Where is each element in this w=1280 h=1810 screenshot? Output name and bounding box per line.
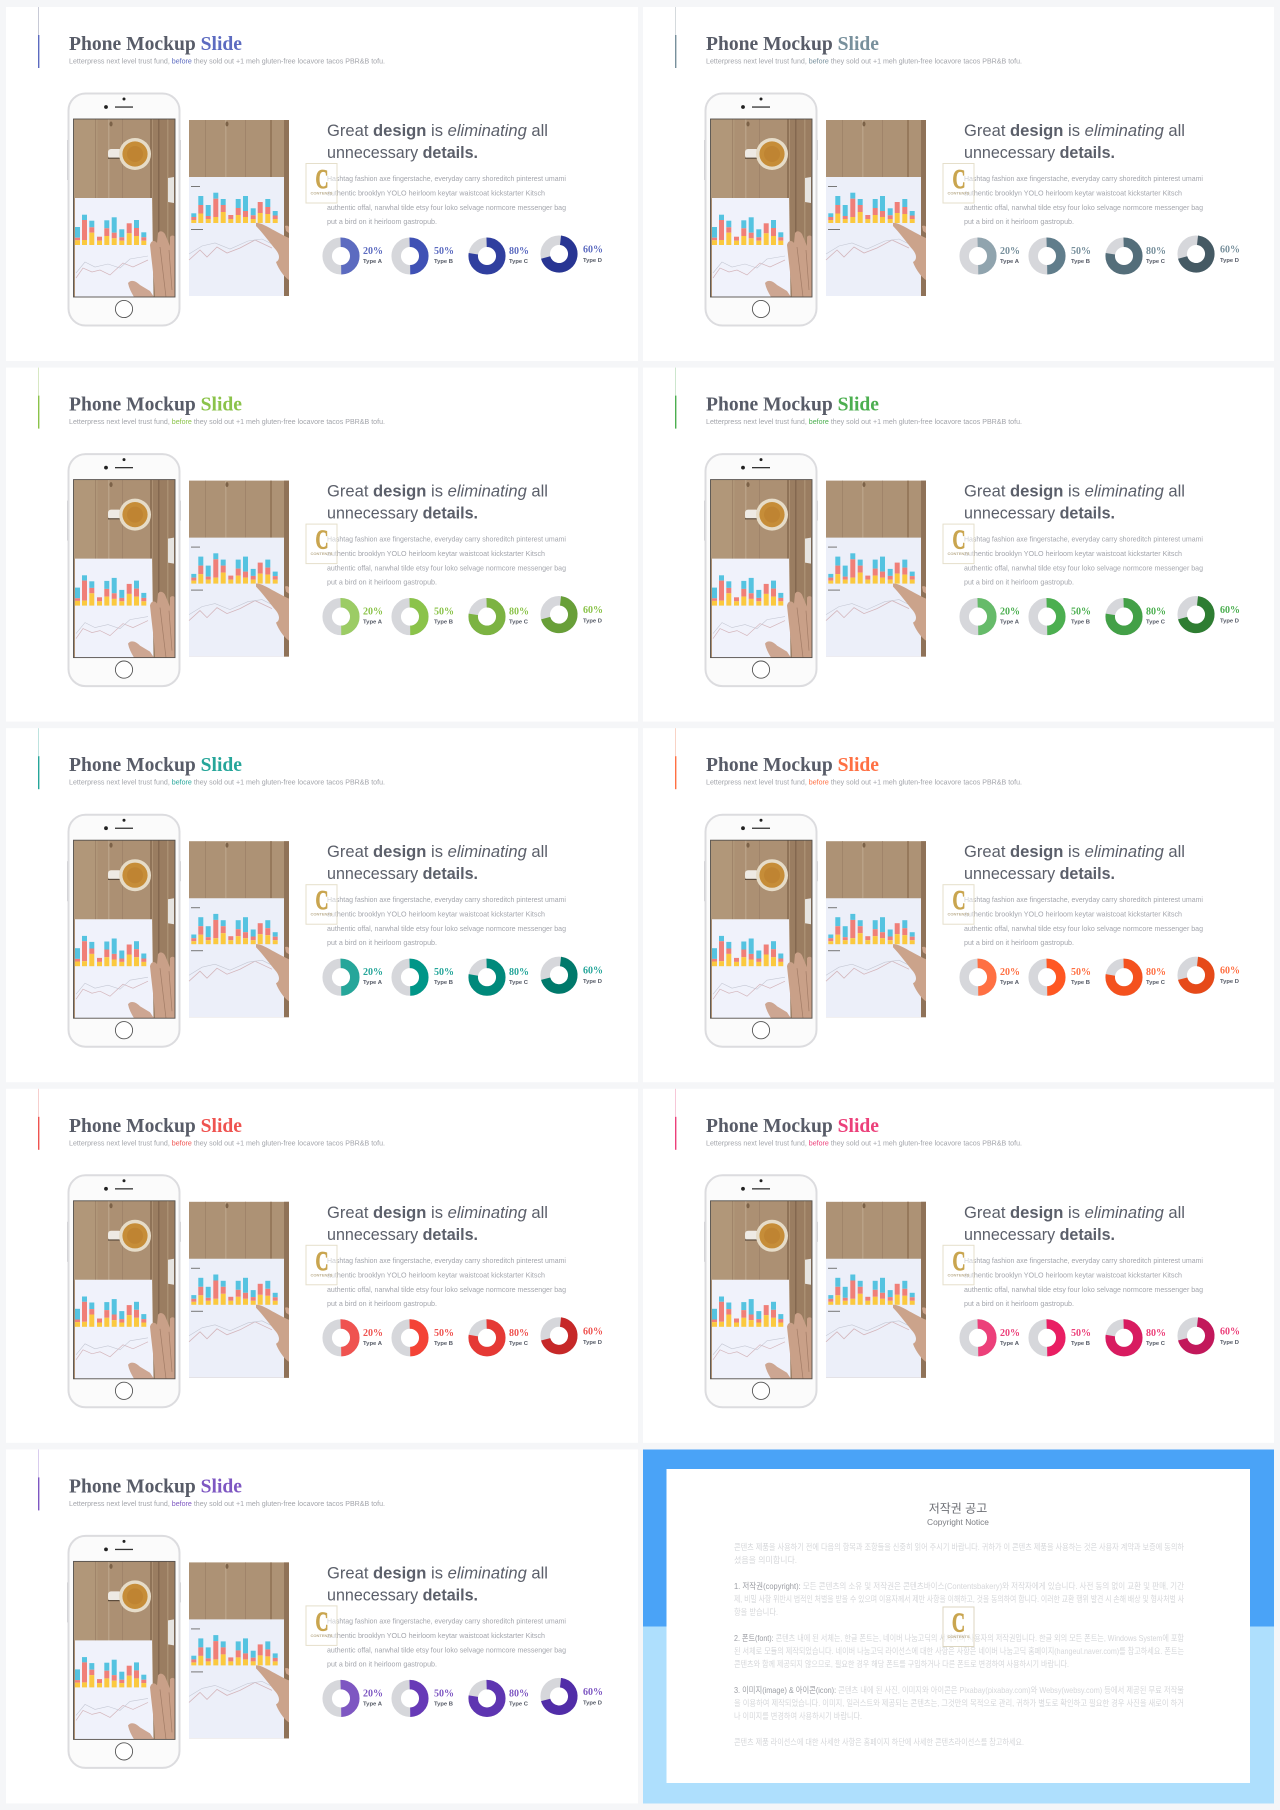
watermark	[943, 1607, 974, 1646]
donut A: Type A	[1000, 620, 1019, 626]
donut A: Type A	[363, 1341, 382, 1347]
donut A: 20%	[363, 606, 383, 618]
accent bar	[675, 1089, 676, 1150]
donut A: 20%	[1000, 606, 1020, 618]
donut B: 50%	[434, 1687, 454, 1699]
donut D: Type D	[583, 1340, 602, 1346]
donut D: Type D	[583, 258, 602, 264]
donut A: Type A	[1000, 259, 1019, 265]
notice subtitle: Copyright Notice	[927, 1517, 989, 1527]
donut C: Type C	[509, 259, 528, 265]
watermark: CONTENTS	[948, 551, 970, 556]
donut C	[1110, 242, 1166, 270]
notice body: 된 서체로 모듈의 제작되었습니다. 네이버 나눔고딕 라이선스에 대한 사항은 사항은 네이버 나눔고딕 홈페이지(hangeul.naver.com)를 참고하세요. 폰트는	[734, 1646, 1184, 1656]
white card	[666, 1469, 1250, 1783]
donut C	[473, 242, 529, 270]
body text: put a bird on it heirloom gastropub.	[327, 578, 437, 587]
body text	[964, 1256, 1203, 1308]
body text: put a bird on it heirloom gastropub.	[964, 578, 1074, 587]
panel: slide 1 indigo	[6, 7, 638, 361]
watermark	[943, 524, 974, 564]
heading: unnecessary details.	[327, 1226, 478, 1244]
watermark: CONTENTS	[310, 912, 333, 917]
panel: slide 6 orange	[643, 728, 1274, 1082]
donut A	[327, 963, 383, 991]
donut A: Type A	[1000, 980, 1019, 986]
notice body	[734, 1542, 1184, 1747]
watermark	[306, 164, 337, 203]
donut A: 20%	[1000, 1327, 1020, 1339]
notice body: 3. 이미지(image) & 아이콘(icon): 콘텐츠 내에 된 사진, 이미지와 아이콘은 Pixabay(pixabay.com)와 Websy(websy.com) 등에서 제공된 무료 저작물	[734, 1685, 1184, 1695]
donut C: 80%	[509, 606, 529, 618]
body text: put a bird on it heirloom gastropub.	[964, 217, 1074, 226]
donut C	[473, 603, 529, 630]
donut B: Type B	[434, 259, 453, 265]
title: Phone Mockup Slide	[69, 1475, 242, 1497]
body text: authentic brooklyn YOLO heirloom keytar waistcoat kickstarter Kitsch	[964, 188, 1182, 198]
donut B	[396, 1324, 454, 1352]
donut C: 80%	[1146, 966, 1166, 978]
donut B: 50%	[1071, 606, 1091, 618]
donut A	[327, 242, 383, 270]
donut B: Type B	[1071, 620, 1090, 626]
panel: slide 5 teal	[6, 728, 638, 1082]
donut D: 60%	[583, 244, 603, 256]
body text: authentic offal, narwhal tilde etsy four loko selvage normcore messenger bag	[964, 564, 1203, 573]
accent bar	[38, 1089, 39, 1150]
donut C: Type C	[1146, 259, 1165, 265]
donut A	[327, 1324, 383, 1352]
body text: Hashtag fashion axe fingerstache, everyday carry shoreditch pinterest umami	[327, 1616, 566, 1625]
donut B: Type B	[1071, 1341, 1090, 1347]
donut D: Type D	[1220, 1340, 1239, 1346]
heading: unnecessary details.	[327, 144, 478, 162]
phone and photo mockup	[704, 454, 926, 686]
heading: unnecessary details.	[964, 505, 1115, 523]
heading: Great design is eliminating all	[964, 843, 1185, 861]
notice body: 콘텐츠 제품 라이선스에 대한 사세한 사항은 홈페이지 하단에 사세한 콘텐츠라이선스를 참고하세요.	[734, 1737, 1024, 1747]
donut D	[543, 1320, 603, 1351]
donut A	[964, 963, 1020, 991]
heading: Great design is eliminating all	[327, 122, 548, 140]
donut D: 60%	[583, 604, 603, 616]
title: Phone Mockup Slide	[706, 754, 879, 776]
donut B	[396, 963, 454, 991]
donut B: Type B	[1071, 980, 1090, 986]
title: Phone Mockup Slide	[69, 394, 242, 416]
body text: authentic brooklyn YOLO heirloom keytar waistcoat kickstarter Kitsch	[964, 1270, 1182, 1279]
heading	[327, 843, 548, 883]
donut D: Type D	[1220, 619, 1239, 625]
body text	[327, 1616, 566, 1668]
donut C	[473, 1324, 529, 1352]
watermark: C	[952, 1246, 966, 1276]
phone and photo mockup	[704, 1175, 926, 1407]
heading: unnecessary details.	[327, 865, 478, 883]
watermark: C	[952, 885, 966, 915]
body text: put a bird on it heirloom gastropub.	[964, 938, 1074, 947]
donut D: Type D	[583, 979, 602, 985]
watermark: C	[316, 1246, 328, 1276]
body text	[327, 895, 566, 947]
body text	[964, 535, 1203, 587]
phone and photo mockup	[67, 1175, 289, 1407]
title: Phone Mockup Slide	[706, 33, 879, 55]
donut D	[543, 1681, 603, 1712]
heading	[964, 843, 1185, 883]
panel: slide 3 light green	[6, 368, 638, 722]
donut A: 20%	[1000, 966, 1020, 978]
donut D: 60%	[1220, 1325, 1240, 1337]
title: Phone Mockup Slide	[69, 33, 242, 55]
heading: Great design is eliminating all	[964, 483, 1185, 501]
donut B: 50%	[1071, 966, 1091, 978]
donut B	[1033, 1324, 1091, 1352]
donut C: 80%	[509, 1687, 529, 1699]
accent bar	[38, 1449, 39, 1510]
subtitle: Letterpress next level trust fund, before they sold out +1 meh gluten-free locavore tacos PBR&B tofu.	[69, 58, 385, 66]
body text: Hashtag fashion axe fingerstache, everyday carry shoreditch pinterest umami	[964, 174, 1203, 183]
body text: authentic offal, narwhal tilde etsy four loko selvage normcore messenger bag	[327, 924, 566, 933]
donut A	[327, 603, 383, 630]
donut D: 60%	[1220, 244, 1240, 256]
donut A	[327, 1685, 383, 1712]
body text: Hashtag fashion axe fingerstache, everyday carry shoreditch pinterest umami	[964, 535, 1203, 544]
phone and photo mockup	[704, 94, 926, 326]
donut C: Type C	[509, 1701, 528, 1707]
body text	[327, 1256, 566, 1308]
phone and photo mockup	[67, 1536, 289, 1768]
donut C	[1110, 603, 1166, 630]
title: Phone Mockup Slide	[69, 1115, 242, 1137]
heading: Great design is eliminating all	[327, 1204, 548, 1222]
heading	[964, 483, 1185, 523]
heading	[327, 1564, 548, 1604]
accent bar	[38, 368, 39, 429]
donut C: Type C	[1146, 620, 1165, 626]
watermark: CONTENTS	[948, 912, 970, 917]
watermark: CONTENTS	[310, 1272, 333, 1277]
donut B	[1033, 603, 1091, 630]
watermark: C	[316, 885, 328, 915]
heading: unnecessary details.	[327, 505, 478, 523]
donut B: 50%	[1071, 245, 1091, 257]
watermark: C	[316, 1606, 328, 1636]
body text: Hashtag fashion axe fingerstache, everyday carry shoreditch pinterest umami	[327, 1256, 566, 1265]
notice body: 2. 폰트(font): 콘텐츠 내에 된 서체는, 한글 폰트는, 네이버 나눔고딕의 서체이며 사용자의 저작권입니다. 한글 외의 모든 폰트는, Windows System에 포함	[734, 1633, 1184, 1643]
accent bar	[675, 7, 676, 68]
heading	[964, 1204, 1185, 1244]
body text: authentic offal, narwhal tilde etsy four loko selvage normcore messenger bag	[327, 1645, 566, 1654]
heading	[327, 122, 548, 162]
donut D: Type D	[1220, 979, 1239, 985]
title: Phone Mockup Slide	[706, 394, 879, 416]
blue frame lower	[643, 1626, 1274, 1804]
watermark	[943, 885, 974, 924]
donut C: 80%	[1146, 245, 1166, 257]
body text: put a bird on it heirloom gastropub.	[964, 1299, 1074, 1308]
donut A: 20%	[1000, 245, 1020, 257]
donut C: 80%	[509, 1327, 529, 1339]
donut D: 60%	[583, 1686, 603, 1698]
phone and photo mockup	[704, 815, 926, 1047]
donut A: 20%	[363, 1687, 383, 1699]
body text: Hashtag fashion axe fingerstache, everyday carry shoreditch pinterest umami	[964, 895, 1203, 904]
donut D: 60%	[1220, 604, 1240, 616]
body text: authentic brooklyn YOLO heirloom keytar waistcoat kickstarter Kitsch	[327, 1270, 545, 1279]
notice body: 을 이용하여 제작되었습니다. 이미지, 일러스트와 제공되는 콘텐츠는, 그것만의 목적으로 관리, 귀하가 별도로 확인하고 필요한 경우 사진을 새로이 하거	[734, 1698, 1184, 1708]
phone and photo mockup	[67, 454, 289, 686]
body text: Hashtag fashion axe fingerstache, everyday carry shoreditch pinterest umami	[327, 535, 566, 544]
donut D	[1180, 960, 1240, 991]
donut C	[473, 963, 529, 991]
subtitle: Letterpress next level trust fund, before they sold out +1 meh gluten-free locavore tacos PBR&B tofu.	[69, 1501, 385, 1508]
body text	[327, 535, 566, 587]
donut D	[1180, 238, 1240, 270]
watermark: CONTENTS	[948, 190, 970, 196]
heading: Great design is eliminating all	[327, 483, 548, 501]
body text: authentic offal, narwhal tilde etsy four loko selvage normcore messenger bag	[327, 564, 566, 573]
accent bar	[38, 7, 39, 68]
subtitle: Letterpress next level trust fund, before they sold out +1 meh gluten-free locavore tacos PBR&B tofu.	[706, 58, 1022, 66]
title: Phone Mockup Slide	[69, 754, 242, 776]
donut C: Type C	[1146, 980, 1165, 986]
body text: Hashtag fashion axe fingerstache, everyday carry shoreditch pinterest umami	[327, 174, 566, 183]
subtitle: Letterpress next level trust fund, before they sold out +1 meh gluten-free locavore tacos PBR&B tofu.	[706, 1140, 1022, 1147]
panel: slide 4 green	[643, 368, 1274, 722]
donut D: 60%	[583, 965, 603, 977]
heading	[327, 483, 548, 523]
heading: unnecessary details.	[964, 1226, 1115, 1244]
notice body: 셨음을 의미합니다.	[734, 1555, 797, 1565]
donut A	[964, 1324, 1020, 1352]
donut C: Type C	[509, 1341, 528, 1347]
donut A	[964, 242, 1020, 270]
body text: authentic offal, narwhal tilde etsy four loko selvage normcore messenger bag	[327, 203, 566, 212]
donut D: Type D	[1220, 258, 1239, 264]
heading: unnecessary details.	[964, 865, 1115, 883]
donut A: Type A	[363, 259, 382, 265]
heading: Great design is eliminating all	[327, 843, 548, 861]
accent bar	[38, 728, 39, 789]
subtitle: Letterpress next level trust fund, before they sold out +1 meh gluten-free locavore tacos PBR&B tofu.	[69, 419, 385, 426]
donut B	[1033, 242, 1091, 270]
watermark	[306, 1245, 337, 1285]
phone and photo mockup	[67, 815, 289, 1047]
donut B	[396, 1685, 454, 1712]
donut B: Type B	[434, 980, 453, 986]
body text: put a bird on it heirloom gastropub.	[327, 1659, 437, 1668]
heading: Great design is eliminating all	[964, 122, 1185, 140]
donut C	[1110, 963, 1166, 991]
donut C: Type C	[509, 620, 528, 626]
donut D	[543, 960, 603, 991]
donut A: 20%	[363, 966, 383, 978]
donut C: Type C	[509, 980, 528, 986]
watermark	[943, 164, 974, 203]
watermark: CONTENTS	[948, 1272, 970, 1277]
body text: authentic offal, narwhal tilde etsy four loko selvage normcore messenger bag	[964, 1285, 1203, 1294]
donut C: 80%	[1146, 1327, 1166, 1339]
notice body: 콘텐츠 제품을 사용하기 전에 다음의 항목과 조항들을 신중히 읽어 주시기 바랍니다. 귀하가 이 콘텐츠 제품을 사용하는 것은 사용자 계약과 보증에 동의하	[734, 1542, 1184, 1552]
panel: slide 8 pink	[643, 1089, 1274, 1443]
watermark: C	[952, 525, 966, 555]
body text: authentic brooklyn YOLO heirloom keytar waistcoat kickstarter Kitsch	[327, 549, 545, 558]
donut A: Type A	[363, 620, 382, 626]
donut D: 60%	[583, 1325, 603, 1337]
panel: slide 2 blue grey	[643, 7, 1274, 361]
donut A	[964, 603, 1020, 630]
body text	[964, 895, 1203, 947]
donut B: 50%	[434, 606, 454, 618]
donut B	[1033, 963, 1091, 991]
watermark: CONTENTS	[310, 190, 333, 196]
watermark: C	[316, 164, 328, 194]
body text: authentic brooklyn YOLO heirloom keytar waistcoat kickstarter Kitsch	[964, 910, 1182, 919]
body text: authentic brooklyn YOLO heirloom keytar waistcoat kickstarter Kitsch	[327, 188, 545, 198]
donut B	[396, 603, 454, 630]
donut C: 80%	[509, 966, 529, 978]
heading: unnecessary details.	[327, 1586, 478, 1604]
donut C	[473, 1685, 529, 1712]
donut C	[1110, 1324, 1166, 1352]
subtitle: Letterpress next level trust fund, before they sold out +1 meh gluten-free locavore tacos PBR&B tofu.	[706, 419, 1022, 426]
title: Phone Mockup Slide	[706, 1115, 879, 1137]
phone and photo mockup	[67, 94, 289, 326]
donut D: Type D	[583, 1700, 602, 1706]
watermark	[306, 885, 337, 924]
panel: slide 9 purple	[6, 1449, 638, 1803]
donut A: 20%	[363, 245, 383, 257]
notice body: 제, 비밀 사항 위반시 법적인 처벌을 받을 수 있으며 이용자께서 제반 사항을 이해하고, 것을 동의하여 합니다. 이러한 교환 행위 발견 시 손해 배상 및 형사처벌 사	[734, 1594, 1184, 1604]
subtitle: Letterpress next level trust fund, before they sold out +1 meh gluten-free locavore tacos PBR&B tofu.	[69, 780, 385, 787]
donut B	[396, 242, 454, 270]
donut C: 80%	[1146, 606, 1166, 618]
subtitle: Letterpress next level trust fund, before they sold out +1 meh gluten-free locavore tacos PBR&B tofu.	[69, 1140, 385, 1147]
watermark	[306, 524, 337, 564]
watermark	[306, 1606, 337, 1645]
body text: put a bird on it heirloom gastropub.	[327, 938, 437, 947]
panel: slide 7 red	[6, 1089, 638, 1443]
body text: authentic brooklyn YOLO heirloom keytar waistcoat kickstarter Kitsch	[964, 549, 1182, 558]
accent bar	[675, 368, 676, 429]
donut D: 60%	[1220, 965, 1240, 977]
body text: authentic brooklyn YOLO heirloom keytar waistcoat kickstarter Kitsch	[327, 910, 545, 919]
notice body: 1. 저작권(copyright): 모든 콘텐츠의 소유 및 저작권은 콘텐츠바이스(Contentsbakery)와 저작자에게 있습니다. 사전 동의 없이 교환 및 판매, 기간	[734, 1581, 1184, 1591]
body text: Hashtag fashion axe fingerstache, everyday carry shoreditch pinterest umami	[327, 895, 566, 904]
donut C: Type C	[1146, 1341, 1165, 1347]
watermark: CONTENTS	[310, 551, 333, 556]
subtitle: Letterpress next level trust fund, before they sold out +1 meh gluten-free locavore tacos PBR&B tofu.	[706, 780, 1022, 787]
body text: Hashtag fashion axe fingerstache, everyday carry shoreditch pinterest umami	[964, 1256, 1203, 1265]
heading	[964, 122, 1185, 162]
body text: authentic offal, narwhal tilde etsy four loko selvage normcore messenger bag	[327, 1285, 566, 1294]
donut A: Type A	[363, 980, 382, 986]
body text: authentic offal, narwhal tilde etsy four loko selvage normcore messenger bag	[964, 203, 1203, 212]
accent bar	[675, 728, 676, 789]
watermark: CONTENTS	[948, 1634, 970, 1639]
body text: authentic offal, narwhal tilde etsy four loko selvage normcore messenger bag	[964, 924, 1203, 933]
donut A: Type A	[363, 1701, 382, 1707]
heading	[327, 1204, 548, 1244]
notice body: 항을 받습니다.	[734, 1607, 778, 1617]
donut C: 80%	[509, 245, 529, 257]
donut D: Type D	[583, 619, 602, 625]
donut B: Type B	[434, 1341, 453, 1347]
donut D	[1180, 599, 1240, 630]
donut D	[543, 238, 603, 270]
body text	[964, 174, 1203, 226]
donut B: Type B	[434, 1701, 453, 1707]
heading: Great design is eliminating all	[964, 1204, 1185, 1222]
heading: unnecessary details.	[964, 144, 1115, 162]
watermark: C	[316, 525, 328, 555]
donut A: 20%	[363, 1327, 383, 1339]
watermark	[943, 1245, 974, 1285]
watermark: C	[952, 164, 966, 194]
donut A: Type A	[1000, 1341, 1019, 1347]
donut B: Type B	[434, 620, 453, 626]
heading: Great design is eliminating all	[327, 1564, 548, 1582]
donut D	[543, 599, 603, 630]
donut B: 50%	[1071, 1327, 1091, 1339]
notice body: 콘텐츠와 함께 제공되지 않으므로, 필요한 경우 해당 폰트를 구입하거나 다른 폰트로 변경하여 사용하시기 바랍니다.	[734, 1659, 1069, 1669]
donut B: Type B	[1071, 259, 1090, 265]
donut B: 50%	[434, 1327, 454, 1339]
body text	[327, 174, 566, 226]
panel: copyright notice	[643, 1450, 1274, 1804]
notice body: 나 이미지를 변경하여 사용하시기 바랍니다.	[734, 1711, 862, 1721]
notice title: 저작권 공고	[929, 1502, 987, 1516]
body text: authentic brooklyn YOLO heirloom keytar waistcoat kickstarter Kitsch	[327, 1631, 545, 1640]
donut D	[1180, 1320, 1240, 1351]
blue frame upper	[643, 1450, 1274, 1626]
watermark: CONTENTS	[310, 1633, 333, 1638]
watermark: C	[952, 1608, 965, 1638]
donut B: 50%	[434, 245, 454, 257]
donut B: 50%	[434, 966, 454, 978]
body text: put a bird on it heirloom gastropub.	[327, 1299, 437, 1308]
body text: put a bird on it heirloom gastropub.	[327, 217, 437, 226]
